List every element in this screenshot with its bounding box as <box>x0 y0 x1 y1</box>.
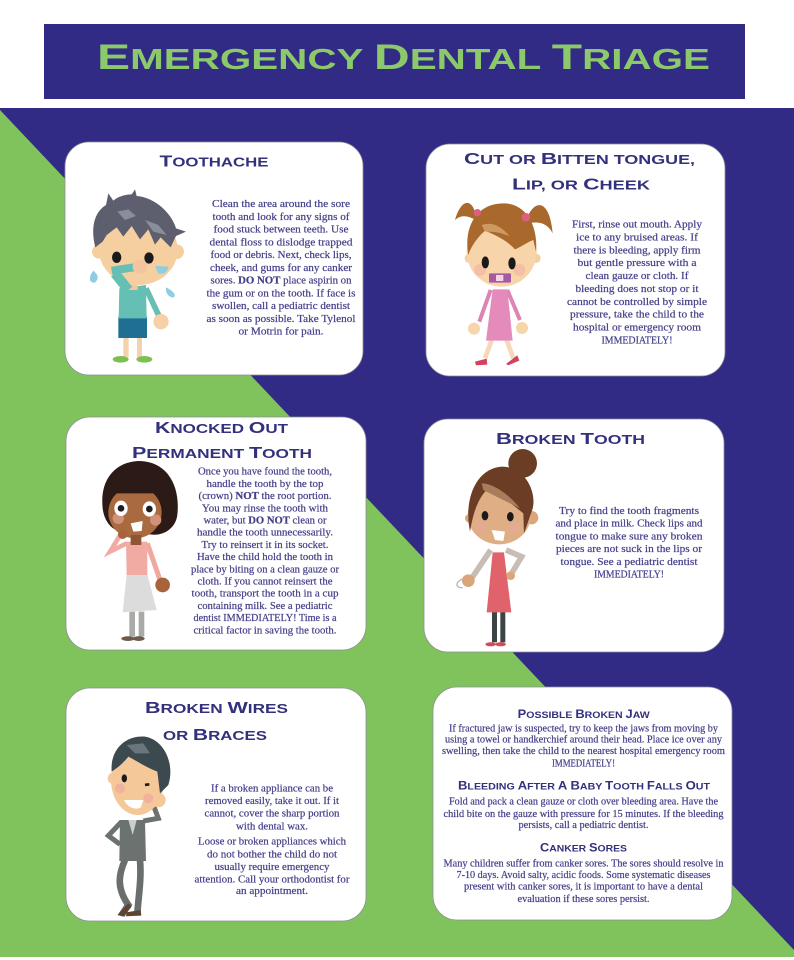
text: toothache instructions: tooth and look for any signs of <box>212 211 350 223</box>
text: canker sores: evaluation if these sores persist. <box>518 893 650 905</box>
text: knocked out instructions: critical factor in saving the tooth. <box>194 624 337 636</box>
text: cut instructions: ice to any bruised areas. If <box>576 232 698 244</box>
text: cut instructions: but gentle pressure with a <box>578 257 697 269</box>
text: toothache instructions: cheek, and gums for any canker <box>210 262 352 274</box>
text: possible broken jaw <box>442 722 725 769</box>
title: E MERGENCY D ENTAL T RIAGE <box>97 38 710 77</box>
text: bleeding: persists, call a pediatric dentist. <box>518 819 649 831</box>
text: toothache instructions: dental floss to dislodge trapped <box>210 236 353 248</box>
panel: toothache <box>65 142 363 375</box>
text: knocked out instructions: handle the tooth unnecessarily. <box>197 527 333 539</box>
text: knocked out instructions: (crown) NOT the root portion. <box>198 490 332 502</box>
text: broken tooth instructions: IMMEDIATELY! <box>594 568 664 580</box>
icon: crying boy <box>90 189 186 363</box>
text: broken wires instructions: attention. Call your orthodontist for <box>194 874 350 886</box>
text: broken tooth instructions: tongue. See a pediatric dentist <box>560 556 698 568</box>
text: cut instructions: pressure, take the child to the <box>570 309 704 321</box>
text: knocked out instructions: Have the child hold the tooth in <box>197 551 333 563</box>
heading: possible broken jaw: POSSIBLE BROKEN JAW <box>518 709 650 721</box>
text: knocked out instructions <box>191 466 339 636</box>
text: knocked out instructions: water, but DO NOT clean or <box>204 514 327 526</box>
text: broken wires instructions: cannot, cover the sharp portion <box>204 808 340 820</box>
text: bleeding: Fold and pack a clean gauze or cloth over bleeding area. Have the <box>449 796 718 808</box>
text: possible broken jaw: swelling, then take the child to the nearest hospital emergency room <box>442 745 725 757</box>
text: broken tooth instructions: Try to find the tooth fragments <box>559 505 699 517</box>
text: cut instructions: bleeding does not stop or it <box>576 283 698 295</box>
heading: broken tooth: B ROKEN T OOTH <box>496 431 645 448</box>
text: possible broken jaw: If fractured jaw is suspected, try to keep the jaws from moving by <box>449 722 718 734</box>
heading: knocked out permanent tooth: K NOCKED O UT <box>155 420 288 437</box>
text: broken tooth instructions <box>556 505 703 580</box>
icon: girl with knocked out tooth <box>102 461 178 641</box>
text: toothache instructions: food stuck between teeth. Use <box>214 224 349 236</box>
text: broken wires instructions <box>194 782 350 897</box>
text: knocked out instructions: Once you have found the tooth, <box>198 466 332 478</box>
text: broken wires instructions: removed easily, take it out. If it <box>205 795 339 807</box>
text: toothache instructions: as soon as possible. Take Tylenol <box>206 313 356 325</box>
text: broken tooth instructions: and place in milk. Check lips and <box>556 518 703 530</box>
text: toothache instructions: swollen, call a pediatric dentist <box>212 300 350 312</box>
text: toothache instructions <box>206 198 356 338</box>
panel: broken tooth <box>424 419 724 652</box>
panel: broken wires or braces <box>66 688 366 921</box>
heading: broken wires or braces <box>145 700 289 744</box>
icon: girl with bandage <box>455 203 553 365</box>
heading: canker sores: CANKER SORES <box>540 842 627 854</box>
text: cut instructions: IMMEDIATELY! <box>602 334 672 346</box>
title banner <box>44 24 745 99</box>
text: knocked out instructions: tooth, transport the tooth in a cup <box>192 588 339 600</box>
heading: cut or bitten tongue: C UT OR B ITTEN TONGUE, <box>464 151 695 168</box>
text: knocked out instructions: cloth. If you cannot reinsert the <box>198 576 333 588</box>
text: cut instructions <box>567 219 707 346</box>
text: bleeding: child bite on the gauze with pressure for 15 minutes. If the bleeding <box>444 808 724 820</box>
text: broken wires instructions: do not bother the child do not <box>207 848 337 860</box>
text: broken wires instructions: an appointment. <box>236 885 308 897</box>
panel: cut or bitten tongue, lip, or cheek <box>426 144 725 376</box>
icon: boy with braces <box>108 737 170 917</box>
text: canker sores <box>444 857 724 905</box>
heading: bleeding after a baby tooth falls out: BLEEDING AFTER A B ABY TOOTH FALLS OUT <box>458 780 710 792</box>
text: broken tooth instructions: tongue to make sure any broken <box>556 530 703 542</box>
text: knocked out instructions: place by biting on a clean gauze or <box>191 563 339 575</box>
text: knocked out instructions: containing milk. See a pediatric <box>198 600 333 612</box>
text: broken wires instructions: Loose or broken appliances which <box>198 836 346 848</box>
heading: broken wires or braces: OR B RACES <box>163 727 268 744</box>
text: toothache instructions: sores. DO NOT place aspirin on <box>210 275 352 287</box>
text: broken wires instructions: with dental wax. <box>236 820 308 832</box>
text: knocked out instructions: Try to reinsert it in its socket. <box>202 539 329 551</box>
text: toothache instructions: the gum or on the tooth. If face is <box>206 287 356 299</box>
heading: toothache: TOOTHACHE <box>160 154 269 170</box>
text: possible broken jaw: IMMEDIATELY! <box>552 757 615 769</box>
text: broken wires instructions: usually require emergency <box>214 861 330 873</box>
text: cut instructions: cannot be controlled by simple <box>567 296 707 308</box>
text: broken wires instructions: If a broken appliance can be <box>211 782 333 794</box>
text: knocked out instructions: You may rinse the tooth with <box>202 502 328 514</box>
icon: girl with broken tooth <box>457 449 538 646</box>
text: toothache instructions: Clean the area around the sore <box>212 198 350 210</box>
text: knocked out instructions: dentist IMMEDIATELY! Time is a <box>194 612 337 624</box>
heading: knocked out permanent tooth: P ERMANENT T OOTH <box>132 445 312 462</box>
text: cut instructions: there is bleeding, apply firm <box>574 244 701 256</box>
text: possible broken jaw: using a towel or handkerchief around their head. Place ice over any <box>445 734 722 746</box>
text: cut instructions: hospital or emergency room <box>573 322 701 334</box>
text: canker sores: 7-10 days. Avoid salty, acidic foods. Some systematic diseases <box>456 869 710 881</box>
text: cut instructions: First, rinse out mouth. Apply <box>572 219 703 231</box>
text: toothache instructions: or Motrin for pain. <box>238 326 324 338</box>
text: canker sores: present with canker sores, it is important to have a dental <box>464 881 703 893</box>
text: broken tooth instructions: pieces are not suck in the lips or <box>556 543 702 555</box>
panel: other emergencies <box>433 687 732 920</box>
text: toothache instructions: food or debris. Next, check lips, <box>210 249 352 261</box>
heading: knocked out permanent tooth <box>132 420 312 462</box>
text: knocked out instructions: handle the tooth by the top <box>206 478 324 490</box>
panel: knocked out permanent tooth <box>66 417 366 650</box>
text: cut instructions: clean gauze or cloth. If <box>586 270 689 282</box>
heading: cut or bitten tongue <box>464 151 695 193</box>
text: bleeding <box>444 796 724 831</box>
heading: cut or bitten tongue: L IP, OR C HEEK <box>512 176 651 193</box>
text: canker sores: Many children suffer from canker sores. The sores should resolve in <box>444 857 724 869</box>
heading: broken wires or braces: B ROKEN W IRES <box>145 700 289 717</box>
